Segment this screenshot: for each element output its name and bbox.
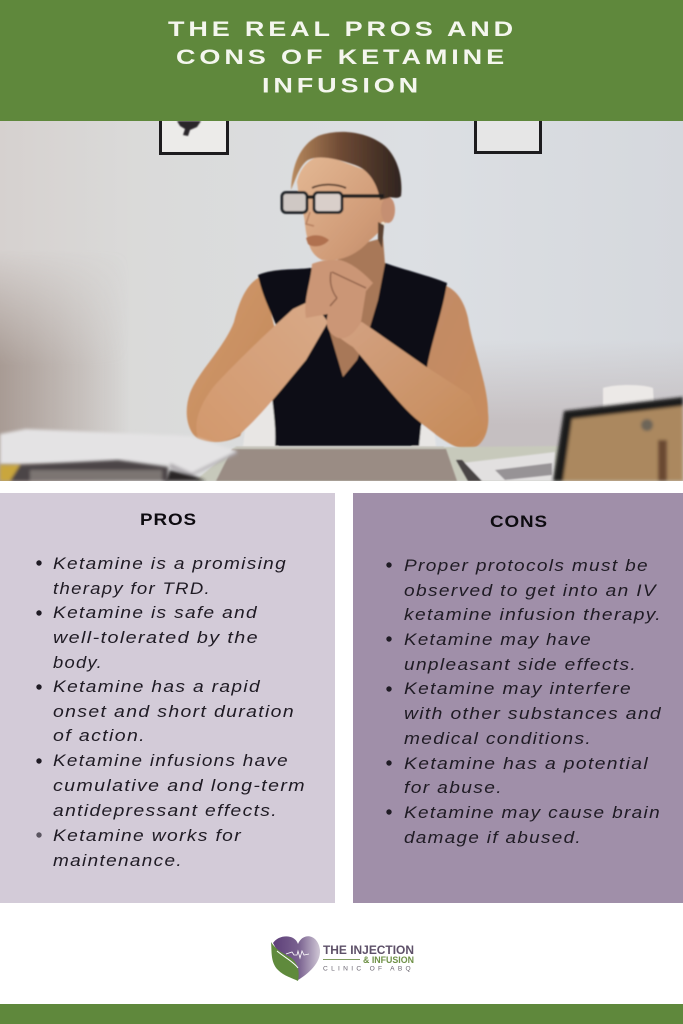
- list: cons bullets: ketamine infusion therapy.: [404, 605, 662, 624]
- list: cons bullets: unpleasant side effects.: [404, 655, 637, 674]
- list: cons bullets: for abuse.: [404, 778, 503, 797]
- list: cons bullets: [386, 556, 662, 847]
- logo text: CLINIC OF ABQ: [323, 966, 414, 972]
- icon: heart and leaf: [271, 936, 320, 981]
- list: cons bullets: Ketamine may interfere: [404, 679, 632, 698]
- dress: [258, 263, 447, 446]
- ear: [381, 197, 395, 223]
- list: pros bullets: maintenance.: [53, 851, 183, 870]
- list: pros bullets: [36, 554, 306, 870]
- left picture frame: [160, 118, 228, 154]
- heading: pros: PROS: [140, 511, 197, 529]
- panel: pros: [0, 493, 335, 903]
- logo text: THE INJECTION: [323, 945, 414, 957]
- nose shade: [306, 212, 314, 226]
- list: pros bullets: of action.: [53, 726, 146, 745]
- list: pros bullets: Ketamine is a promising: [53, 554, 287, 573]
- earring: [381, 222, 385, 226]
- list: cons bullets: Ketamine may have: [404, 630, 592, 649]
- list: pros bullets: Ketamine infusions have: [53, 751, 289, 770]
- laptop: [216, 448, 457, 481]
- list: pros bullets: cumulative and long-term: [53, 776, 306, 795]
- left forearm: [196, 300, 328, 442]
- newspaper: [456, 452, 555, 481]
- chair back: [243, 395, 278, 447]
- list: pros bullets: antidepressant effects.: [53, 801, 278, 820]
- glasses: [282, 192, 384, 212]
- title: CONS OF KETAMINE: [176, 46, 508, 69]
- list: pros bullets: well-tolerated by the: [53, 628, 259, 647]
- list: pros bullets: body.: [53, 653, 103, 672]
- neck and chest: [327, 238, 385, 377]
- title: [168, 18, 517, 98]
- right forearm: [340, 322, 444, 434]
- list: pros bullets: therapy for TRD.: [53, 579, 211, 598]
- woman: [187, 132, 488, 450]
- title: INFUSION: [262, 74, 422, 98]
- list: cons bullets: Ketamine has a potential: [404, 754, 649, 773]
- heading: cons: CONS: [490, 513, 548, 531]
- right upper arm: [426, 284, 490, 448]
- list: cons bullets: with other substances and: [404, 704, 662, 723]
- list: cons bullets: damage if abused.: [404, 828, 582, 847]
- list: pros bullets: onset and short duration: [53, 702, 295, 721]
- list: cons bullets: medical conditions.: [404, 729, 592, 748]
- panel: cons: [353, 493, 683, 903]
- desk surface: [198, 446, 556, 481]
- wall: [0, 121, 683, 481]
- list: cons bullets: Proper protocols must be: [404, 556, 649, 575]
- list: pros bullets: Ketamine has a rapid: [53, 677, 261, 696]
- lips: [306, 235, 329, 246]
- list: cons bullets: Ketamine may cause brain: [404, 803, 661, 822]
- list: pros bullets: Ketamine is safe and: [53, 603, 258, 622]
- list: pros bullets: Ketamine works for: [53, 826, 242, 845]
- logo text: [323, 945, 414, 972]
- logo text: & INFUSION: [363, 955, 414, 965]
- open book: [0, 429, 237, 481]
- face: [297, 156, 389, 260]
- eyebrows: [312, 185, 346, 188]
- list: cons bullets: observed to get into an IV: [404, 581, 658, 600]
- title: THE REAL PROS AND: [168, 18, 517, 41]
- photo: woman at a desk: [0, 118, 683, 481]
- hair: [291, 132, 401, 200]
- picture frame in foreground: [553, 397, 683, 481]
- footer band: [0, 1004, 683, 1024]
- left upper arm: [187, 276, 280, 442]
- right picture frame: [476, 118, 540, 152]
- hands: [305, 260, 373, 338]
- header band: [0, 0, 683, 121]
- logo: [271, 936, 414, 981]
- coffee cup: [603, 385, 654, 410]
- dark notebook: [0, 460, 168, 481]
